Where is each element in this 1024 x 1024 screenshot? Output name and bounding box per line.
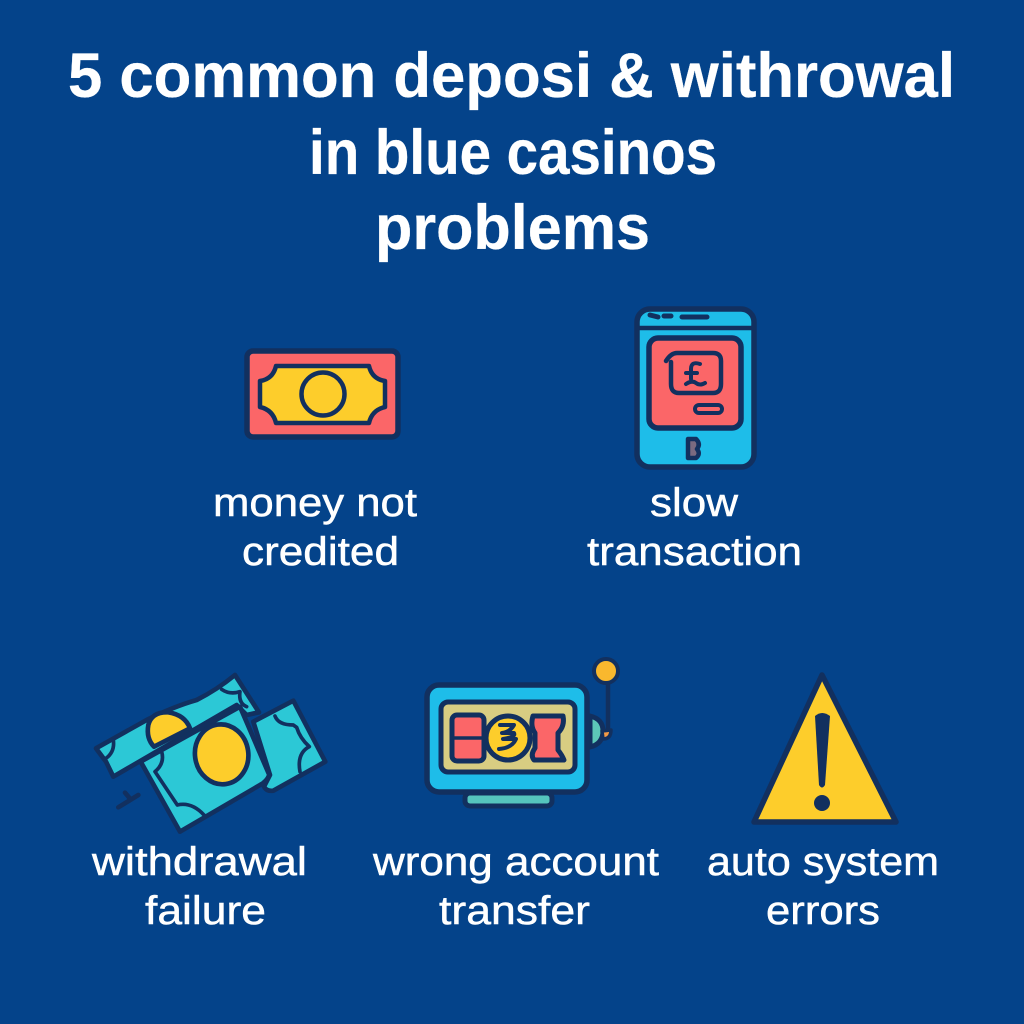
label: withdrawal failure: withdrawal [91,840,307,884]
label: withdrawal failure [91,840,307,933]
icon: red banknote [247,351,398,437]
title [68,41,955,263]
label: auto system errors: errors [766,889,880,933]
title: in blue casinos [309,118,717,188]
label: slow transaction [587,481,802,574]
label: wrong account transfer: wrong account [372,840,659,884]
title: 5 common deposi & withrowal [68,41,955,111]
icon: warning triangle [754,675,896,822]
label: auto system errors [707,840,939,933]
label: slow transaction: transaction [587,530,802,574]
label: auto system errors: auto system [707,840,939,884]
label: money not credited: credited [242,530,399,574]
icon: teal banknotes [96,675,325,832]
label: withdrawal failure: failure [145,889,266,933]
label: slow transaction: slow [650,481,738,525]
title: problems [375,193,650,263]
label: wrong account transfer [372,840,659,933]
label: money not credited: money not [213,481,417,525]
icon: slot machine [427,659,618,806]
icon: phone with payment screen [637,309,754,467]
label: wrong account transfer: transfer [439,889,590,933]
label: money not credited [213,481,417,574]
